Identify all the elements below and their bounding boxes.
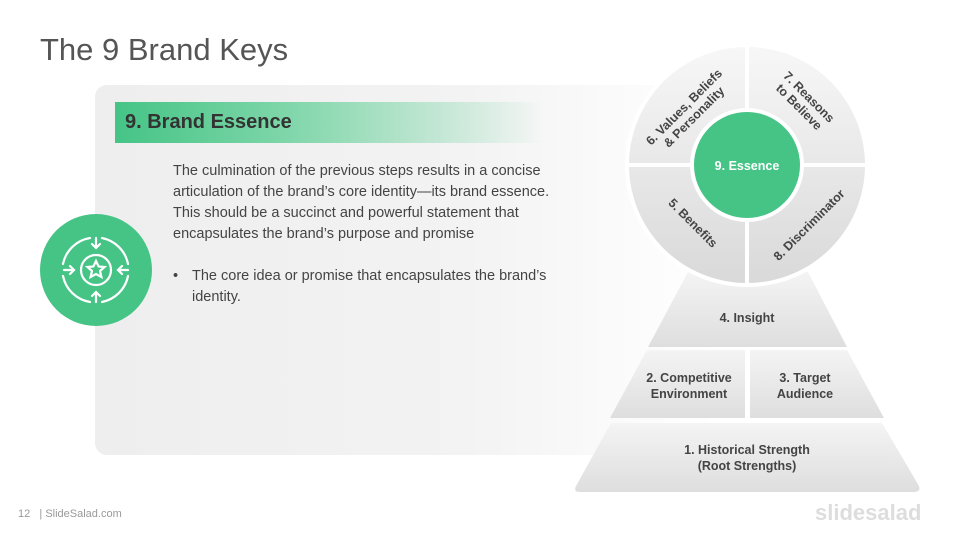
bullet text: The core idea or promise that encapsulates the brand’s identity. (192, 268, 546, 305)
footer: page number: 12 | SlideSalad.com (18, 508, 122, 520)
text block: description: The culmination of the previous steps results in a concise articulation of the brand’s core identity—its brand essence. This should be a succinct and powerful statement that encapsulates the brand’s purpose and promise (173, 163, 549, 242)
title: The 9 Brand Keys (40, 32, 288, 67)
wheel center: essence (694, 112, 800, 218)
logo: slidesalad (815, 500, 921, 525)
bullet text: • (173, 268, 178, 284)
segment labels: & Personality (661, 84, 727, 150)
heading bar (115, 102, 545, 143)
pyramid row: insight (648, 272, 847, 347)
wheel: 9. Essence (715, 159, 779, 173)
pyramid row: insight: 4. Insight (720, 311, 775, 325)
segment labels: 8. Discriminator (771, 187, 848, 264)
pyramid row: historical strength: (Root Strengths) (698, 459, 796, 473)
segment labels (643, 66, 848, 264)
icon: essence star cycle (40, 214, 152, 326)
pyramid row: historical strength (575, 423, 919, 492)
pyramid row: competitive environment: Environment (651, 387, 728, 401)
segment labels: 7. Reasons (781, 69, 837, 125)
pyramid row: competitive environment (610, 350, 745, 418)
panel: content background (95, 85, 715, 455)
segment labels: 5. Benefits (666, 196, 720, 251)
segment labels: to Believe (773, 81, 825, 133)
segment labels: 6. Values, Beliefs (643, 66, 725, 148)
pyramid row: historical strength: 1. Historical Strength (684, 443, 810, 457)
heading text: 9. Brand Essence (125, 111, 292, 133)
pyramid row: target audience: 3. Target (779, 371, 831, 385)
pyramid row: target audience (750, 350, 884, 418)
pyramid row: competitive environment: 2. Competitive (646, 371, 732, 385)
pyramid row: target audience: Audience (777, 387, 833, 401)
wheel (625, 43, 869, 287)
